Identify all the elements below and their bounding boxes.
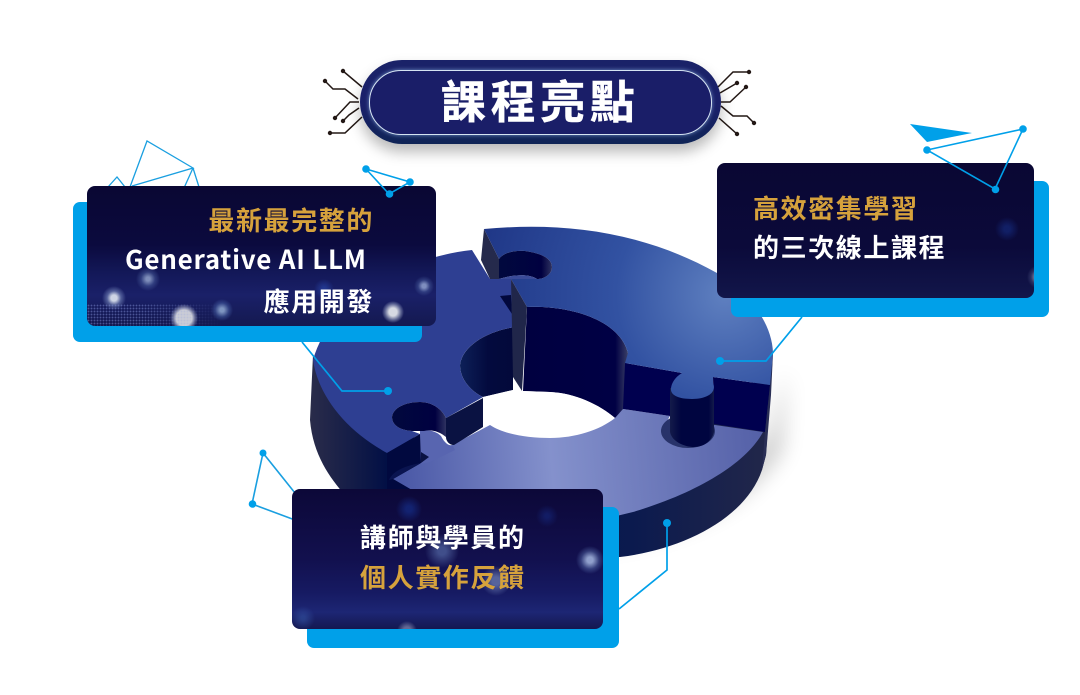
heading white: Generative AI LLM xyxy=(125,240,367,277)
top notch hollow xyxy=(499,251,552,279)
joint shadow xyxy=(421,452,429,463)
heading gold: 高效密集學習 xyxy=(753,189,919,226)
left piece front wall xyxy=(387,434,421,490)
left piece tab wall xyxy=(446,398,483,445)
right channel wall one xyxy=(623,363,682,416)
left puzzle piece xyxy=(313,250,516,453)
connector: left card to ring xyxy=(302,342,392,395)
paper plane icon xyxy=(910,124,972,142)
node triangle: right card xyxy=(923,125,1027,193)
right side strip xyxy=(762,353,773,470)
joint curve shadow xyxy=(389,463,421,480)
puzzle cylinder xyxy=(670,388,714,447)
tab in notch xyxy=(499,275,537,279)
central back wall xyxy=(523,307,628,418)
title pill xyxy=(360,60,721,144)
left piece inner notch shadow xyxy=(500,295,512,314)
connector: bottom card to ring xyxy=(619,519,671,609)
cylinder floor shadow xyxy=(661,414,715,448)
top puzzle piece xyxy=(484,227,773,399)
right card xyxy=(717,163,1034,298)
inner cut wall xyxy=(511,279,527,391)
left card xyxy=(87,186,436,326)
title inner outline xyxy=(369,70,712,135)
left hole wall xyxy=(460,327,516,397)
left card text xyxy=(125,201,374,319)
connector: right card to ring xyxy=(716,317,802,365)
left card backing xyxy=(73,202,422,342)
heading gold: 最新最完整的 xyxy=(208,201,374,238)
node triangle: left card xyxy=(362,165,414,198)
bottom puzzle piece xyxy=(393,409,763,530)
right channel wall two xyxy=(713,377,770,432)
sub heading white: 應用開發 xyxy=(264,282,374,319)
bottom card backing xyxy=(307,507,619,648)
top notch wall xyxy=(481,229,499,279)
heading gold: 個人實作反饋 xyxy=(360,558,526,595)
right card backing xyxy=(731,181,1049,317)
left piece notch xyxy=(392,402,446,437)
right card text xyxy=(753,189,946,265)
heading white: 講師與學員的 xyxy=(360,518,526,555)
ring side wall xyxy=(310,353,773,560)
title text: 課程亮點 xyxy=(441,77,639,128)
bottom piece tab under notch xyxy=(420,430,455,464)
dot texture xyxy=(88,304,212,326)
bottom card xyxy=(292,489,603,629)
bottom card text xyxy=(360,518,526,595)
ring shadow xyxy=(330,370,786,547)
heading white: 的三次線上課程 xyxy=(753,228,946,265)
ring centre hole xyxy=(483,375,615,438)
